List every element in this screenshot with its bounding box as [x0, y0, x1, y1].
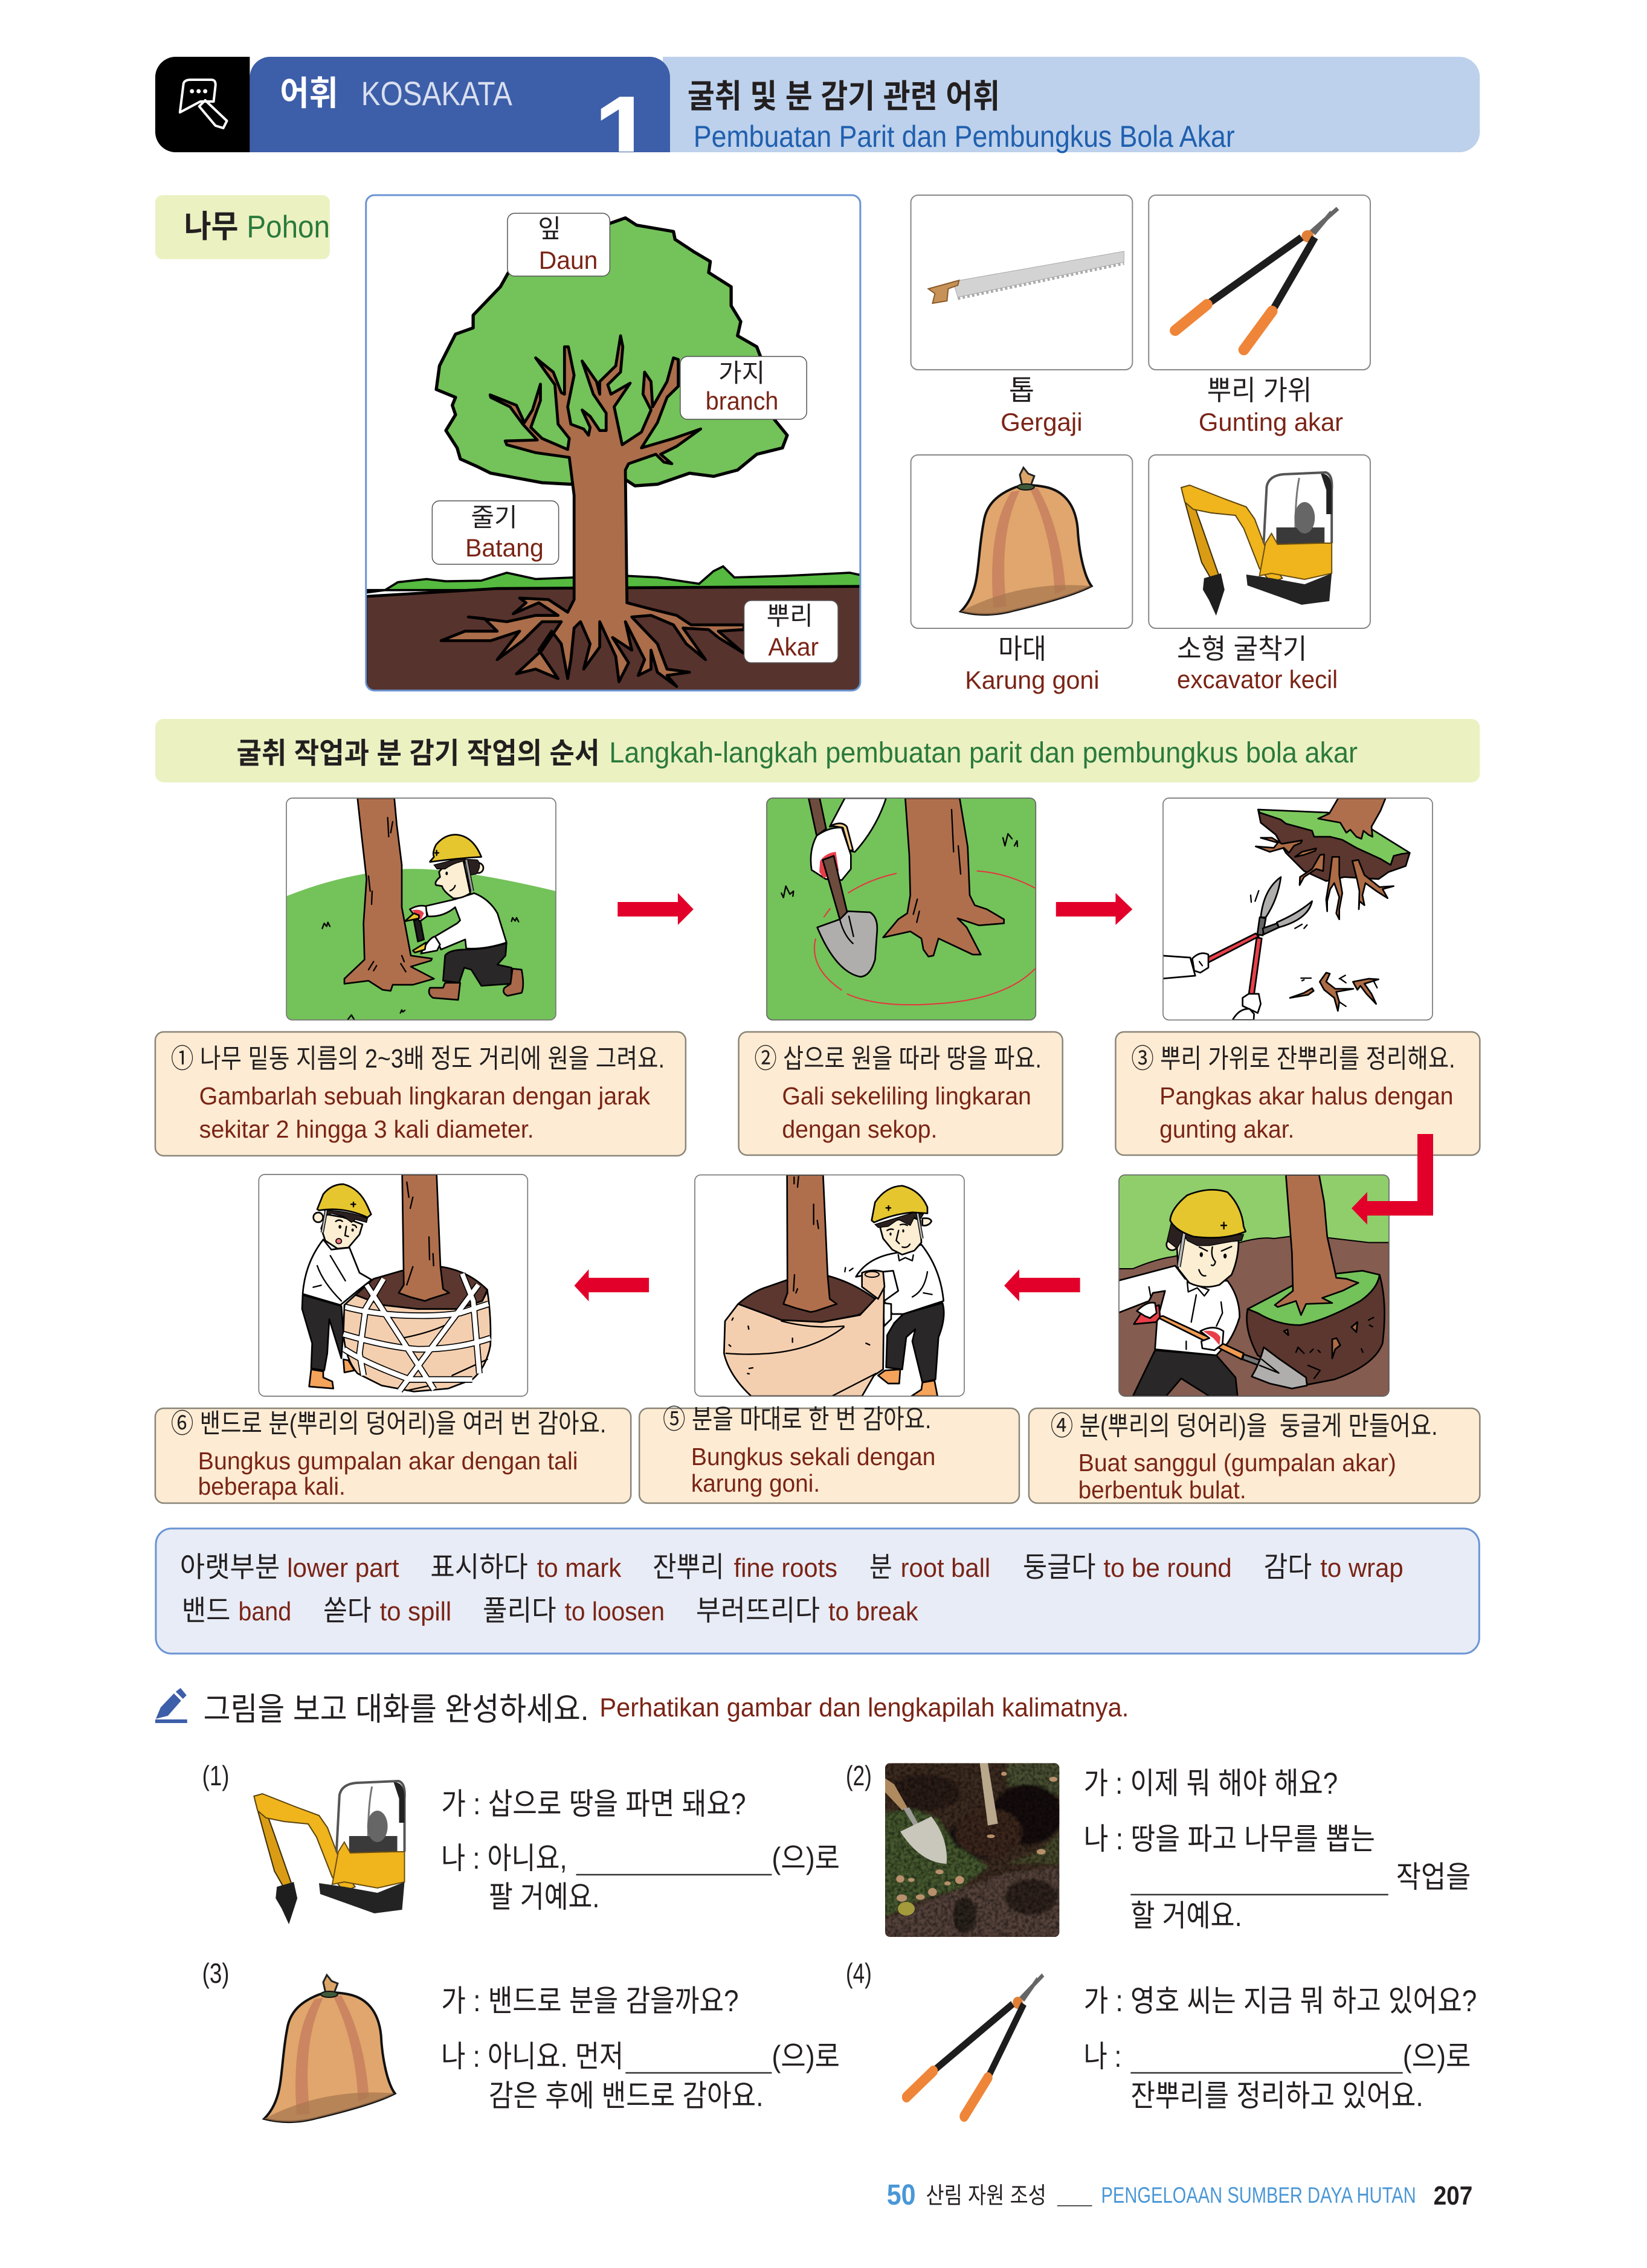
- exercise 4: (4): [846, 1957, 872, 1989]
- exercise 3: [202, 1957, 840, 2122]
- header tab: blue: [250, 57, 670, 152]
- label: sack: Karung goni: [965, 666, 1100, 694]
- arrow right: [1056, 893, 1132, 925]
- panel: tree diagram: [366, 195, 869, 694]
- section heading: steps: 굴취 작업과 분 감기 작업의 순서: [236, 738, 599, 770]
- dialogue 4: 나 :: [1084, 2040, 1121, 2073]
- label: sack: [965, 633, 1100, 694]
- step text 2: [739, 1032, 1063, 1155]
- dialogue 2: 작업을: [1396, 1860, 1471, 1894]
- title in Indonesian: Pembuatan Parit dan Pembungkus Bola Akar: [694, 120, 1235, 153]
- step text 2: ② 삽으로 원을 따라 땅을 파요.: [754, 1044, 1042, 1074]
- title in Korean: 굴취 및 분 감기 관련 어휘: [688, 79, 1000, 115]
- vocabulary row 1: fine roots: [734, 1553, 837, 1583]
- step text 1: ① 나무 밑동 지름의 2~3배 정도 거리에 원을 그려요.: [171, 1044, 665, 1074]
- icon: pencil: [155, 1688, 187, 1723]
- exercise 2 labels and dialogue: (2): [846, 1760, 872, 1791]
- vocabulary row 2: to break: [828, 1597, 919, 1626]
- icon: loppers: [1175, 208, 1338, 350]
- step text 4: [1029, 1408, 1480, 1504]
- dialogue 3: [441, 1984, 840, 2113]
- heading: vocabulary label: 어휘: [280, 74, 338, 112]
- dialogue 1: 가 : 삽으로 땅을 파면 돼요?: [441, 1787, 746, 1821]
- dialogue 3: 나 : 아니요. 먼저: [441, 2040, 624, 2073]
- vocabulary row 1: 아랫부분: [180, 1551, 280, 1583]
- label: branch: branch: [706, 387, 778, 415]
- icon: excavator: [254, 1781, 405, 1924]
- icon: saw: [928, 251, 1124, 303]
- exercise 1: (1): [202, 1760, 230, 1791]
- step 6 illustration: banding: [259, 1174, 527, 1396]
- vocabulary row 1: 분: [869, 1551, 892, 1583]
- step 2 illustration: digging: [767, 798, 1036, 1020]
- dialogue 4: 가 : 영호 씨는 지금 뭐 하고 있어요?: [1084, 1984, 1477, 2018]
- icon: speech bubble with pencil: [155, 57, 250, 152]
- step text 4: Buat sanggul (gumpalan akar): [1078, 1449, 1396, 1477]
- label: saw: Gergaji: [1001, 408, 1083, 436]
- card: burlap sack: [911, 455, 1132, 694]
- step text 3: [1115, 1032, 1480, 1155]
- exercise 3: (3): [202, 1957, 230, 1989]
- tag: tree: 나무: [184, 210, 238, 245]
- label: trunk: 줄기: [471, 503, 517, 532]
- dialogue 3: 가 : 밴드로 분을 감을까요?: [441, 1984, 739, 2018]
- step text 1: Gambarlah sebuah lingkaran dengan jarak: [199, 1082, 651, 1110]
- vocabulary row 2: 부러뜨리다: [696, 1595, 820, 1626]
- icon: loppers: [906, 1975, 1043, 2116]
- label: root: [744, 601, 838, 663]
- step 5 illustration: wrapping with burlap: [695, 1175, 964, 1396]
- vocabulary row 2: 풀리다: [483, 1595, 556, 1626]
- exercise heading: 그림을 보고 대화를 완성하세요.: [204, 1692, 588, 1727]
- step text 3: Pangkas akar halus dengan: [1159, 1082, 1453, 1110]
- dialogue 4: (으)로: [1403, 2040, 1471, 2073]
- step 1 illustration: marking a circle: [286, 798, 556, 1020]
- step text 4: berbentuk bulat.: [1078, 1476, 1246, 1504]
- card: mini excavator: [1149, 455, 1370, 694]
- vocabulary row 1: lower part: [287, 1553, 399, 1583]
- vocabulary row 1: 잔뿌리: [653, 1551, 724, 1583]
- label: excavator: excavator kecil: [1177, 665, 1338, 694]
- vocabulary row 2: 밴드: [182, 1595, 231, 1626]
- label: loppers: Gunting akar: [1199, 408, 1343, 436]
- label: trunk: [432, 501, 559, 564]
- step text 6: Bungkus gumpalan akar dengan tali: [198, 1447, 578, 1475]
- vocabulary row 1: to wrap: [1320, 1553, 1404, 1583]
- vocabulary row 1: [180, 1551, 1404, 1583]
- label: leaf: Daun: [539, 246, 598, 274]
- header banner: [155, 57, 1480, 153]
- label: branch: 가지: [718, 359, 765, 387]
- tree illustration: [366, 218, 869, 694]
- label: trunk: Batang: [465, 533, 544, 562]
- exercise 2 labels and dialogue: [846, 1760, 1471, 1933]
- card: root loppers: [1149, 195, 1370, 436]
- step text 3: gunting akar.: [1159, 1115, 1294, 1143]
- dialogue 3: 감은 후에 밴드로 감아요.: [489, 2079, 763, 2113]
- section heading: steps: Langkah-langkah pembuatan parit dan pembungkus bola akar: [609, 737, 1358, 769]
- footer: 207: [1434, 2181, 1472, 2211]
- heading: KOSAKATA: KOSAKATA: [361, 74, 512, 112]
- tag: tree: [155, 195, 330, 259]
- dialogue 1: [441, 1787, 840, 1914]
- exercise heading: Perhatikan gambar dan lengkapilah kalimatnya.: [599, 1693, 1129, 1722]
- icon: sack: [264, 1975, 395, 2122]
- dialogue 1: (으)로: [772, 1841, 840, 1875]
- step text 5: Bungkus sekali dengan: [691, 1443, 935, 1471]
- step text 1: sekitar 2 hingga 3 kali diameter.: [199, 1115, 534, 1143]
- dialogue 1: 나 : 아니요,: [441, 1841, 567, 1875]
- vocabulary row 1: root ball: [901, 1553, 990, 1583]
- label: leaf: [508, 213, 610, 276]
- vocabulary row 2: [182, 1595, 919, 1626]
- step text 3: ③ 뿌리 가위로 잔뿌리를 정리해요.: [1131, 1044, 1455, 1074]
- step 3 illustration: trimming roots: [1161, 798, 1433, 1020]
- footer: 50: [887, 2179, 916, 2211]
- arrow: down then left: [1352, 1134, 1433, 1225]
- label: excavator: [1177, 633, 1338, 694]
- card: saw: [911, 195, 1132, 436]
- exercise 4: [846, 1957, 1477, 2116]
- vocabulary row 1: 둥글다: [1023, 1551, 1096, 1583]
- label: leaf: 잎: [538, 214, 561, 243]
- step text 6: ⑥ 밴드로 분(뿌리의 덩어리)을 여러 번 감아요.: [171, 1409, 606, 1438]
- vocabulary row 2: band: [238, 1597, 291, 1626]
- header title bar: light blue: [663, 57, 1480, 152]
- footer: 산림 자원 조성: [926, 2183, 1046, 2209]
- label: excavator: 소형 굴착기: [1177, 633, 1307, 665]
- icon: excavator: [1181, 472, 1332, 616]
- arrow left: [575, 1269, 649, 1301]
- step text 4: ④ 분(뿌리의 덩어리)을 둥글게 만들어요.: [1051, 1411, 1438, 1441]
- arrow right: [617, 893, 694, 925]
- step text 6: beberapa kali.: [198, 1472, 346, 1500]
- section heading: steps: [155, 719, 1480, 782]
- step text 1: [155, 1032, 686, 1156]
- dialogue 1: 팔 거예요.: [489, 1880, 599, 1914]
- tag: tree: Pohon: [247, 210, 330, 245]
- vocabulary row 2: to spill: [380, 1597, 451, 1626]
- step text 2: dengan sekop.: [782, 1115, 937, 1143]
- vocabulary row 2: 쏟다: [323, 1595, 372, 1626]
- vocabulary box: [156, 1529, 1479, 1654]
- dialogue 2: 나 : 땅을 파고 나무를 뽑는: [1084, 1822, 1375, 1856]
- label: saw: 톱: [1009, 375, 1034, 406]
- vocabulary row 2: to loosen: [565, 1597, 665, 1626]
- step 4 illustration: shaping root ball: [1118, 1175, 1389, 1396]
- step text 6: [155, 1408, 631, 1503]
- footer: [887, 2179, 1472, 2211]
- step text 2: Gali sekeliling lingkaran: [782, 1082, 1031, 1110]
- dialogue 2: 할 거예요.: [1130, 1899, 1242, 1933]
- icon: sack: [961, 468, 1092, 614]
- label: branch: [680, 356, 807, 419]
- label: loppers: 뿌리 가위: [1207, 375, 1312, 406]
- footer: PENGELOAAN SUMBER DAYA HUTAN: [1101, 2183, 1416, 2208]
- label: sack: 마대: [998, 633, 1046, 665]
- label: root: 뿌리: [767, 602, 813, 630]
- label: loppers: [1199, 375, 1343, 436]
- unit number: 1: [593, 74, 654, 195]
- arrow left: [1004, 1269, 1080, 1301]
- step text 5: ⑤ 분을 마대로 한 번 감아요.: [663, 1405, 931, 1434]
- dialogue 4: [1084, 1984, 1477, 2113]
- vocabulary row 1: to mark: [537, 1553, 622, 1583]
- vocabulary row 1: 감다: [1264, 1551, 1312, 1583]
- photo: shovel and dug hole: [885, 1763, 1062, 1937]
- dialogue 2: 가 : 이제 뭐 해야 해요?: [1084, 1767, 1338, 1800]
- step text 5: karung goni.: [691, 1469, 820, 1497]
- exercise 1: [202, 1760, 840, 1924]
- exercise heading: [204, 1692, 1129, 1727]
- vocabulary row 1: to be round: [1103, 1553, 1232, 1583]
- dialogue 4: 잔뿌리를 정리하고 있어요.: [1130, 2079, 1423, 2113]
- label: root: Akar: [768, 633, 819, 661]
- label: saw: [1001, 375, 1083, 436]
- dialogue 3: (으)로: [772, 2040, 840, 2073]
- vocabulary row 1: 표시하다: [430, 1551, 528, 1583]
- dialogue 2: [1084, 1767, 1471, 1933]
- step text 5: [639, 1405, 1019, 1503]
